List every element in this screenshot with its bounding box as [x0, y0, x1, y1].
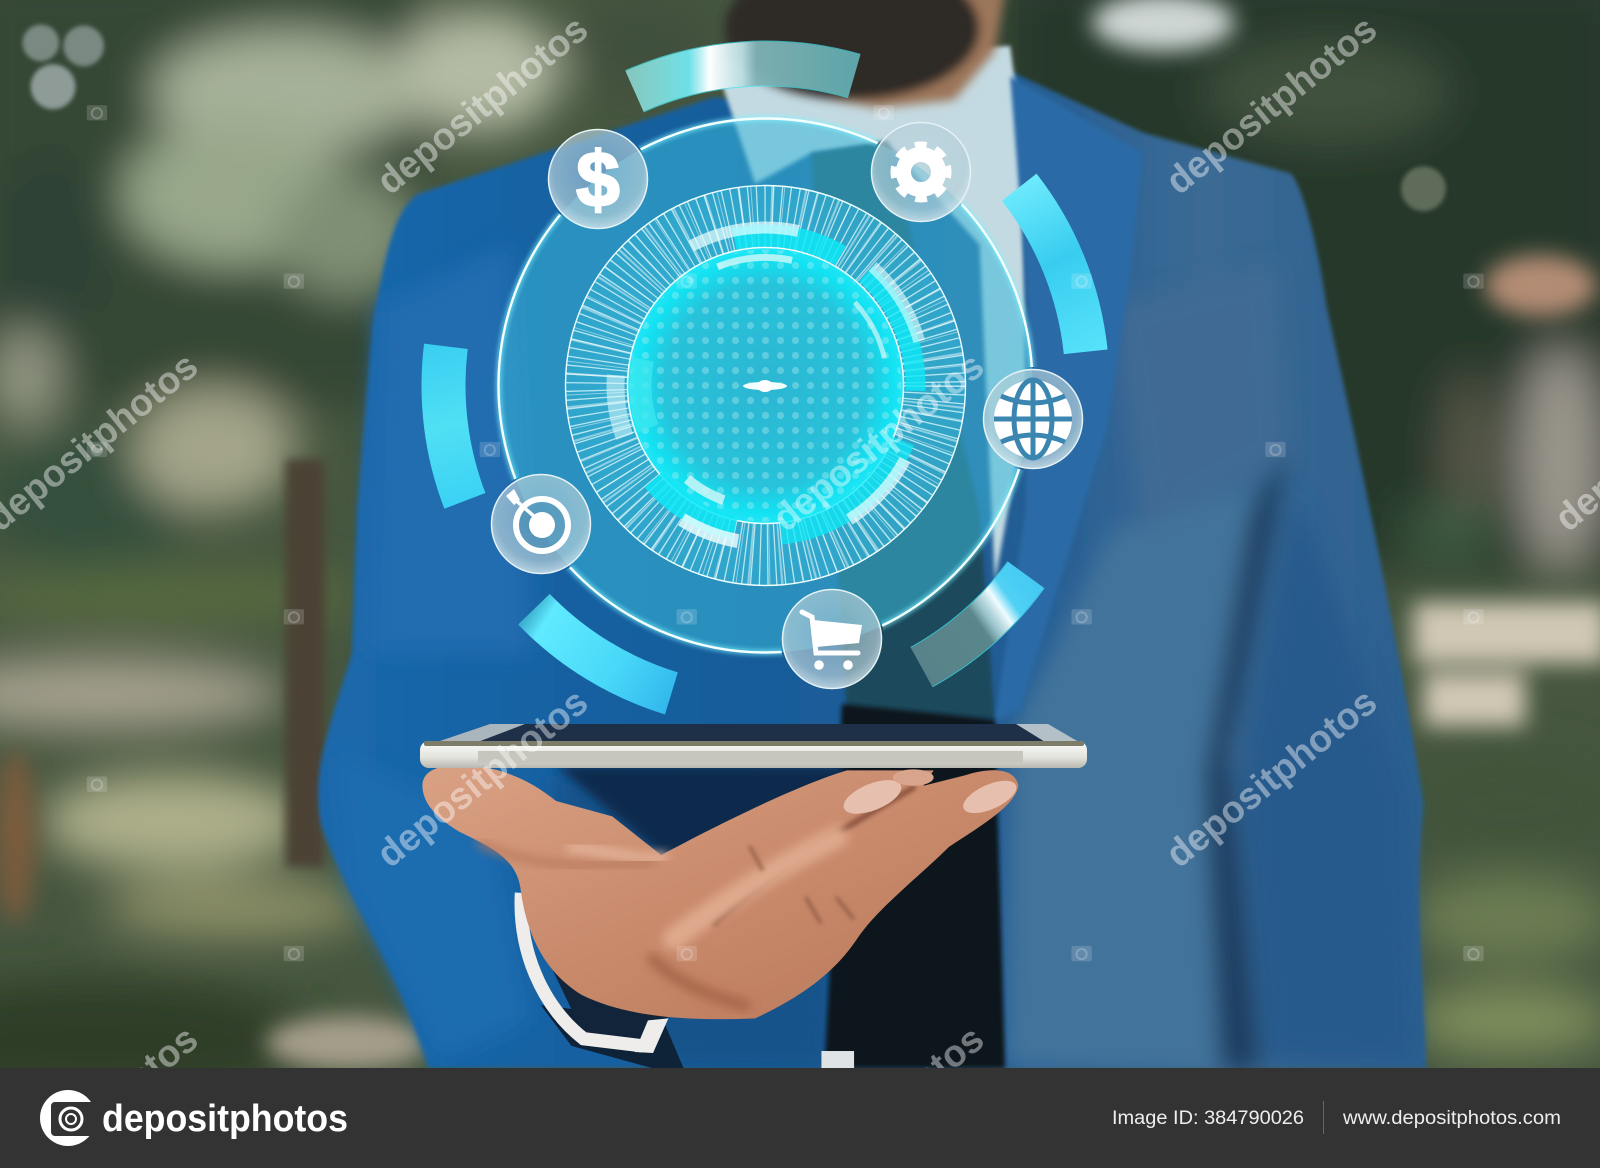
phone metal body	[420, 741, 1087, 768]
small camera watermarks	[87, 105, 1484, 961]
website url: www.depositphotos.com	[1342, 1108, 1561, 1129]
central dotted core	[628, 248, 904, 524]
arc: lower right	[922, 575, 1026, 667]
icon: shopping cart	[782, 590, 882, 688]
arc: top	[634, 64, 854, 91]
hologram glow disk	[498, 118, 1032, 652]
image id: Image ID: 384790026	[1112, 1108, 1304, 1129]
outer arc segments	[444, 64, 1086, 693]
beard and neck	[724, 0, 1005, 108]
hatched radial ring	[566, 186, 966, 586]
arc: lower left	[534, 609, 671, 693]
dark shirt front below phone	[824, 704, 1005, 1068]
fingernails	[839, 773, 906, 821]
icon: dollar: $	[576, 135, 620, 223]
man in blue suit	[318, 0, 1427, 1069]
depositphotos watermarks: depositphotos	[369, 681, 596, 876]
depositphotos watermarks: depositphotos	[1158, 681, 1385, 876]
icon: dollar	[548, 130, 648, 228]
footer logo text: depositphotos	[102, 1098, 348, 1140]
arc: right	[1019, 187, 1086, 352]
smartphone	[420, 724, 1087, 768]
outer ring	[498, 118, 1032, 652]
inner arc highlights	[540, 160, 991, 611]
footer bar	[0, 1068, 1600, 1168]
phone screen surface	[428, 724, 1084, 745]
depositphotos watermarks: depositphotos	[765, 345, 992, 540]
shirt cuff	[521, 893, 668, 1053]
hand	[422, 765, 1018, 1019]
footer logo icon	[40, 1090, 96, 1146]
jacket shading	[337, 245, 1413, 1068]
icon: target	[492, 474, 590, 574]
tie	[811, 141, 995, 719]
icon: gear	[872, 122, 970, 222]
depositphotos watermarks: depositphotos	[1158, 8, 1385, 203]
jacket	[318, 71, 1427, 1068]
right lapel	[995, 77, 1143, 722]
icon: globe	[984, 370, 1082, 468]
hand shading	[480, 788, 913, 1005]
arc: left	[444, 346, 465, 501]
hand holding the phone	[422, 765, 1021, 1053]
depositphotos watermarks: depositphotos	[369, 8, 596, 203]
shirt	[714, 46, 1027, 582]
